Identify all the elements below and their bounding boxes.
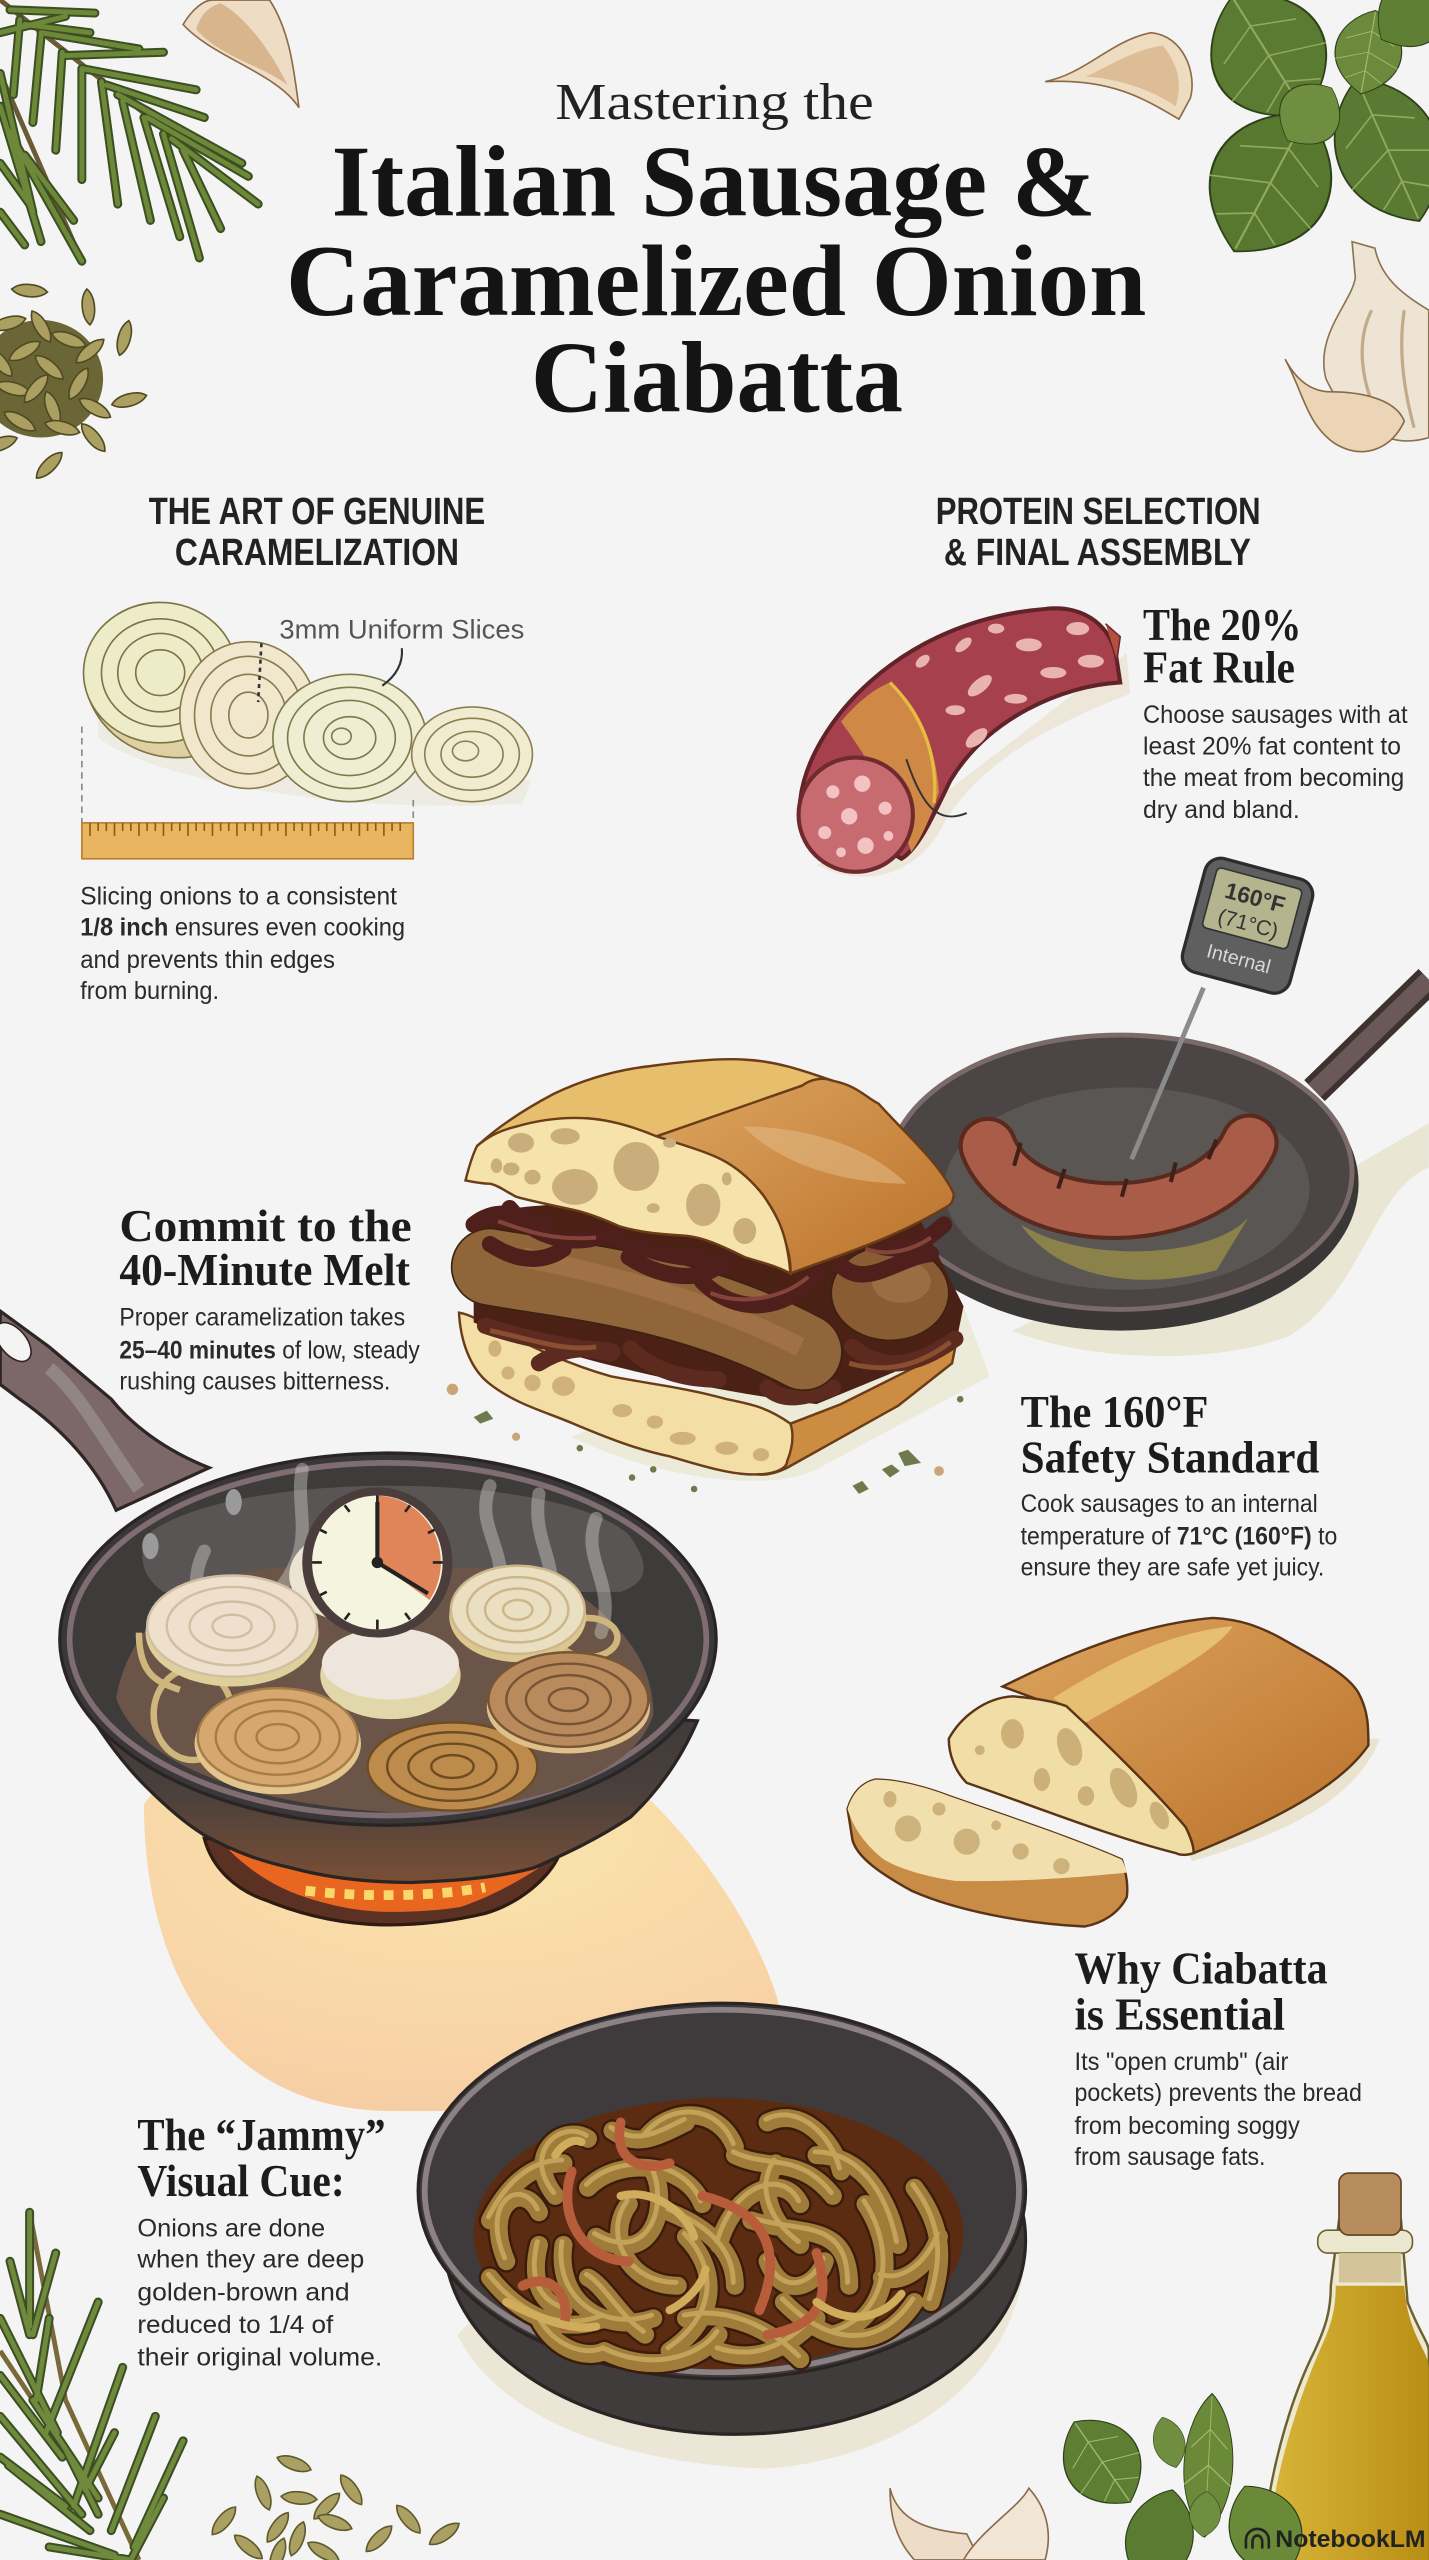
decoration: rosemary bottom left bbox=[0, 2212, 183, 2560]
pan body bbox=[72, 1685, 697, 1882]
section heading: protein: PROTEIN SELECTION bbox=[936, 490, 1261, 532]
section heading: caramelization: THE ART OF GENUINE bbox=[149, 490, 485, 532]
text: the jammy visual cue: when they are deep bbox=[136, 2246, 364, 2274]
cooking liquid bbox=[116, 1567, 653, 1812]
text: slicing onions bbox=[80, 882, 405, 1005]
text: the jammy visual cue: Onions are done bbox=[137, 2215, 325, 2243]
decoration: fennel seeds top left bbox=[0, 283, 148, 482]
text: the jammy visual cue: Visual Cue: bbox=[137, 2155, 345, 2206]
onion: browning lower left bbox=[194, 1688, 361, 1794]
dark filling mass bbox=[474, 1203, 963, 1404]
top bread cut face bbox=[466, 1118, 790, 1273]
text: why ciabatta is essential: from sausage fats. bbox=[1074, 2143, 1266, 2171]
second slice bbox=[180, 642, 317, 789]
section heading: protein bbox=[936, 490, 1261, 573]
text: why ciabatta is essential: pockets) prevents the bread bbox=[1074, 2079, 1362, 2107]
steam bbox=[188, 1469, 605, 1633]
burner bbox=[204, 1838, 557, 1925]
text: the 20% fat rule bbox=[1143, 599, 1408, 824]
loaf cut face bbox=[949, 1696, 1194, 1855]
title: line 2: Caramelized Onion bbox=[286, 225, 1146, 337]
text: the 20% fat rule: least 20% fat content to bbox=[1143, 732, 1401, 760]
text: the 20% fat rule: Choose sausages with at bbox=[1143, 701, 1408, 729]
illustration: pan of jammy onions bbox=[418, 2003, 1026, 2469]
text: commit to the 40-minute melt: 40-Minute Melt bbox=[119, 1244, 411, 1295]
bottom bread crust bbox=[735, 1347, 955, 1475]
text: the 20% fat rule: The 20% bbox=[1143, 599, 1301, 650]
text: why ciabatta is essential: Why Ciabatta bbox=[1074, 1943, 1328, 1994]
text: the 160F safety standard: ensure they are safe yet juicy. bbox=[1021, 1554, 1324, 1582]
loose onion rings bbox=[139, 1618, 617, 1760]
text: the 160F safety standard: Safety Standard bbox=[1021, 1432, 1319, 1483]
thermometer: 160°F bbox=[1222, 877, 1288, 918]
text: the jammy visual cue: their original volume. bbox=[137, 2344, 382, 2372]
pan body bbox=[882, 1037, 1359, 1331]
illustration: ruler bbox=[82, 823, 413, 859]
background glow under burner bbox=[144, 1780, 784, 2111]
thermometer: (71°C) bbox=[1215, 905, 1281, 943]
callout: 3mm uniform slices: 3mm Uniform Slices bbox=[279, 614, 524, 644]
half onion bbox=[83, 602, 239, 758]
text: the 160F safety standard: temperature of 71°C (160°F) to bbox=[1021, 1522, 1337, 1550]
onion: browning lower centre bbox=[368, 1722, 537, 1811]
orange seared band bbox=[841, 682, 939, 852]
text: the jammy visual cue: The “Jammy” bbox=[137, 2109, 386, 2160]
text: the 160F safety standard: The 160°F bbox=[1021, 1386, 1208, 1437]
onion: raw top right bbox=[449, 1566, 586, 1662]
text: commit to the 40-minute melt: Commit to the bbox=[119, 1200, 412, 1251]
text: commit to the 40-minute melt: Proper caramelization takes bbox=[119, 1304, 405, 1332]
third slice bbox=[273, 674, 426, 802]
decoration: basil bottom right bbox=[1043, 2392, 1318, 2560]
onion: steamed middle bbox=[320, 1628, 461, 1719]
text: slicing onions: and prevents thin edges bbox=[80, 946, 335, 974]
illustration: ciabatta loaf and slice bbox=[848, 1618, 1380, 1927]
text: the jammy visual cue bbox=[136, 2109, 386, 2372]
callout: 3mm uniform slices bbox=[82, 614, 524, 823]
text: why ciabatta is essential: is Essential bbox=[1074, 1988, 1285, 2039]
onion: raw top left bbox=[146, 1576, 319, 1687]
slice bbox=[848, 1780, 1127, 1927]
sausage body bbox=[800, 608, 1120, 859]
decoration: rosemary top left bbox=[0, 0, 258, 261]
illustration: onion slices bbox=[83, 602, 532, 806]
text: slicing onions: from burning. bbox=[80, 977, 219, 1005]
text: the 20% fat rule: dry and bland. bbox=[1143, 796, 1300, 824]
decoration: garlic clove top bbox=[183, 0, 299, 108]
bottom bread face bbox=[459, 1313, 793, 1474]
section heading: caramelization bbox=[149, 490, 485, 573]
text: why ciabatta is essential: from becoming soggy bbox=[1074, 2112, 1300, 2140]
pan handle bbox=[0, 1311, 209, 1510]
oil and sausage bbox=[1021, 1216, 1249, 1280]
text: why ciabatta is essential bbox=[1074, 1943, 1362, 2171]
section heading: protein: & FINAL ASSEMBLY bbox=[944, 531, 1251, 573]
text: the 160F safety standard bbox=[1021, 1386, 1337, 1582]
decoration: fennel seeds bottom bbox=[208, 2452, 463, 2560]
onion: browning right bbox=[487, 1652, 650, 1753]
section heading: caramelization: CARAMELIZATION bbox=[175, 531, 459, 573]
pan rivets bbox=[142, 1533, 159, 1559]
onion: steamed back slice bbox=[289, 1530, 413, 1621]
loaf crust bbox=[1003, 1618, 1368, 1853]
thermometer: Internal bbox=[1204, 940, 1273, 978]
cut face bbox=[799, 758, 913, 872]
decoration: garlic bulb right bbox=[1285, 242, 1429, 452]
top bread light crust bbox=[477, 1059, 833, 1146]
pan interior haze bbox=[142, 1486, 644, 1592]
decoration: basil top right bbox=[1181, 0, 1429, 279]
main sausage bbox=[490, 1267, 803, 1352]
text: commit to the 40-minute melt: rushing causes bitterness. bbox=[119, 1367, 390, 1395]
fourth slice bbox=[412, 707, 532, 802]
text: slicing onions: 1/8 inch ensures even cooking bbox=[80, 914, 405, 942]
caramelized onion strands bbox=[488, 2112, 939, 2363]
clock bbox=[302, 1487, 452, 1638]
decoration: garlic clove top right bbox=[1045, 33, 1192, 119]
text: commit to the 40-minute melt: 25–40 minutes of low, steady bbox=[119, 1336, 420, 1364]
text: the jammy visual cue: golden-brown and bbox=[137, 2278, 350, 2306]
title: line 1: Italian Sausage & bbox=[332, 126, 1096, 238]
pan handle bbox=[1314, 980, 1429, 1091]
illustration: big pan with onions and clock bbox=[0, 1311, 716, 1925]
watermark: NotebookLM: NotebookLM bbox=[1275, 2526, 1426, 2553]
crumbs bbox=[447, 1384, 963, 1494]
right sausage bbox=[831, 1246, 949, 1340]
text: slicing onions: Slicing onions to a consistent bbox=[80, 882, 397, 910]
lower onions bbox=[485, 1326, 955, 1397]
text: the 20% fat rule: Fat Rule bbox=[1143, 641, 1295, 692]
decoration: garlic cloves bottom bbox=[890, 2488, 1048, 2560]
upper onions bbox=[474, 1208, 944, 1305]
text: commit to the 40-minute melt bbox=[119, 1200, 420, 1395]
text: the jammy visual cue: reduced to 1/4 of bbox=[137, 2311, 334, 2339]
illustration: olive oil bottle bbox=[1262, 2173, 1429, 2560]
text: the 20% fat rule: the meat from becoming bbox=[1143, 764, 1404, 792]
text: the 160F safety standard: Cook sausages to an internal bbox=[1021, 1490, 1318, 1518]
top bread main crust bbox=[657, 1079, 954, 1273]
text: why ciabatta is essential: Its "open crumb" (air bbox=[1074, 2048, 1288, 2076]
title: kicker: Mastering the bbox=[555, 73, 874, 131]
illustration: salami sausage bbox=[799, 608, 1130, 877]
title: line 3: Ciabatta bbox=[531, 321, 903, 433]
title bbox=[286, 73, 1146, 433]
illustration: sandwich bbox=[447, 1059, 990, 1494]
illustration: frying pan with sausage and thermometer bbox=[882, 855, 1429, 1356]
thermometer bbox=[1132, 855, 1316, 1159]
